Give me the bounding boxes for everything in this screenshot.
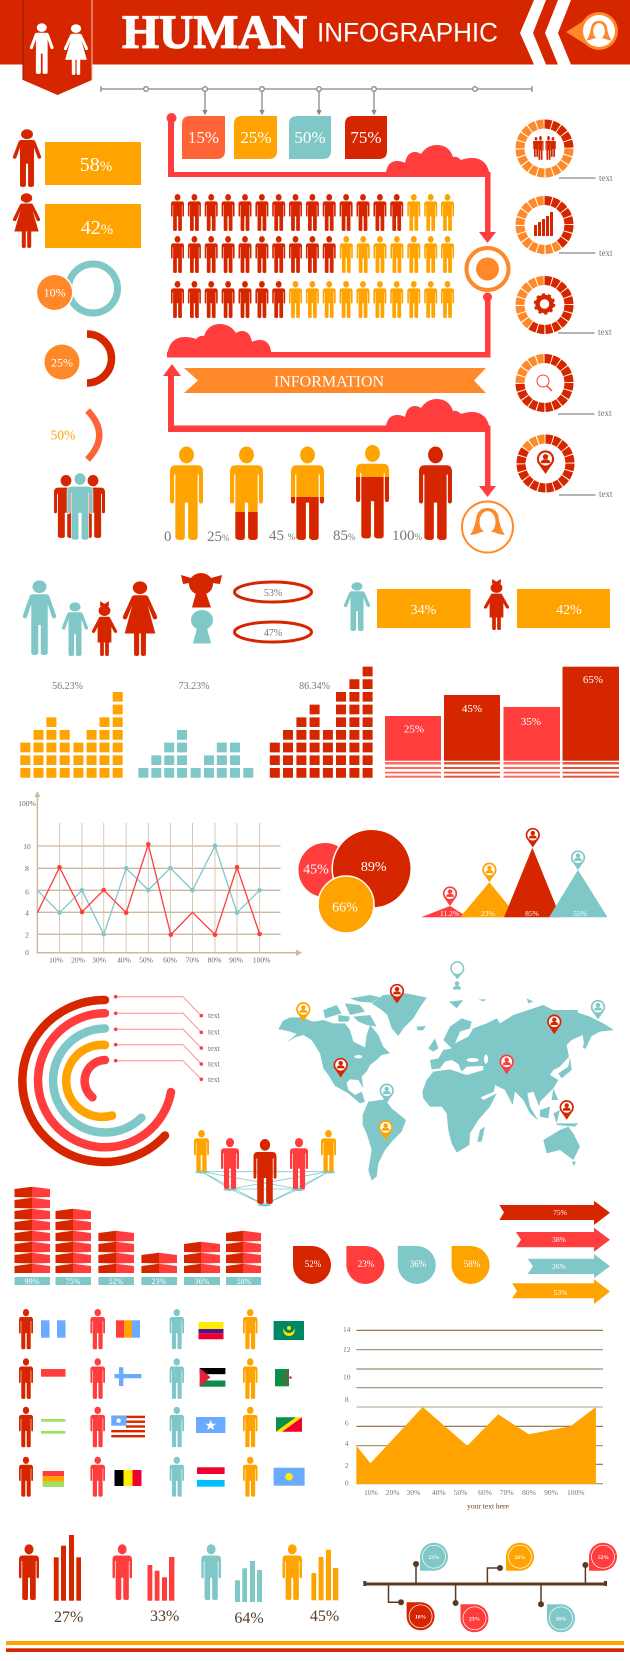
drop shapes: 58%: [464, 1259, 481, 1269]
bottom person bars 33%: [112, 1544, 179, 1625]
column 52%: 52%: [109, 1277, 124, 1286]
line chart: 100%: [18, 799, 36, 808]
flag red bar: [41, 1369, 66, 1377]
people network: [194, 1130, 336, 1206]
area chart: 10: [343, 1372, 351, 1382]
concentric arc chart: [22, 1000, 171, 1162]
ribbon with man and woman: [23, 0, 92, 95]
title: HUMAN: [122, 6, 307, 59]
line chart: 90%: [229, 956, 243, 964]
block chart teal: 73.23%: [179, 681, 209, 692]
bottom person bars 27%: 27%: [54, 1609, 83, 1626]
progress figures: 25%: [207, 529, 230, 545]
arc chart legend: [114, 995, 221, 1084]
line chart: 2: [25, 930, 29, 940]
triangle chart with pins: 23%: [481, 909, 495, 918]
block chart teal: [143, 681, 248, 778]
ellipses 53% 47%: [234, 582, 312, 642]
bottom person bars 45%: [282, 1544, 339, 1625]
left gender bars: 42%: [81, 217, 113, 239]
subtitle: INFOGRAPHIC: [317, 18, 498, 48]
flag cross: [114, 1367, 141, 1386]
ring: location: [521, 439, 613, 499]
area chart: 70%: [500, 1488, 514, 1497]
people with flags column 3: [170, 1309, 225, 1497]
children heads: [181, 573, 222, 644]
ring 50%: 50%: [51, 428, 75, 442]
area chart: 40%: [432, 1488, 446, 1497]
flag green bars: [41, 1419, 66, 1434]
area chart: 12: [343, 1345, 351, 1354]
ring 10%: 10%: [44, 286, 66, 300]
area chart: 0: [345, 1478, 349, 1488]
line chart: 10: [23, 842, 31, 851]
left gender bars: [13, 129, 141, 248]
triangle chart with pins: 85%: [525, 909, 539, 918]
pin drops: 52%: [598, 1555, 609, 1561]
line chart: 40%: [117, 956, 131, 964]
pin drops: 58%: [514, 1555, 526, 1561]
drop shapes: 23%: [358, 1259, 375, 1269]
column 75%: 75%: [66, 1277, 81, 1286]
ring 25%: 25%: [51, 356, 73, 370]
flag blue white blue: [41, 1320, 66, 1338]
arc chart legend: text: [208, 1011, 221, 1020]
column 99%: 99%: [25, 1277, 40, 1286]
line chart: 50%: [139, 956, 153, 964]
family: [23, 580, 157, 656]
arc chart legend: text: [208, 1028, 221, 1036]
icon: header avatar: [566, 12, 618, 50]
flag diagonal: [276, 1417, 302, 1432]
pin drops: [407, 1543, 617, 1632]
map pins: [297, 962, 604, 1140]
group of three people: [54, 473, 105, 540]
ring 10%: [36, 264, 118, 313]
area chart: 90%: [544, 1488, 558, 1497]
flag blue with circle: [274, 1468, 305, 1486]
column 99%: [14, 1187, 50, 1286]
triangle chart with pins: 11.2%: [440, 909, 459, 918]
percentage tabs: 25%: [240, 128, 272, 147]
ring: bars: text: [599, 248, 613, 258]
progress figures: 100%: [392, 528, 422, 544]
block chart red: 86.34%: [299, 681, 330, 692]
arc chart legend: text: [208, 1075, 221, 1084]
flag green crescent: [274, 1321, 304, 1340]
area chart: 80%: [522, 1488, 536, 1497]
boy and girl bars: [344, 579, 610, 631]
information ribbon: INFORMATION: [274, 374, 385, 390]
ring: magnifier: text: [598, 408, 612, 418]
pin drops: 36%: [556, 1616, 566, 1622]
ring: gear: text: [598, 327, 612, 337]
area chart: 2: [345, 1461, 349, 1470]
information ribbon: [184, 368, 486, 393]
percentage tabs: 75%: [350, 128, 382, 147]
flow arrows with clouds: [163, 113, 496, 497]
flag black white green with triangle: [200, 1368, 225, 1387]
flag green with crescent: [275, 1369, 292, 1386]
people with flags column 1: [19, 1309, 66, 1497]
line chart: 80%: [208, 956, 221, 964]
progress figures: 85%: [333, 528, 356, 544]
bottom person bars 33%: 33%: [150, 1608, 179, 1625]
area chart: 8: [345, 1395, 349, 1404]
area chart: 20%: [386, 1488, 399, 1497]
ring: people: [520, 124, 613, 183]
branching timeline: [365, 1543, 617, 1632]
segmented rings: [520, 124, 613, 499]
drop shapes: 36%: [410, 1259, 427, 1269]
line chart: 70%: [186, 956, 199, 964]
bar chart with stripes: 45%: [462, 703, 482, 715]
venn circles: 89%: [361, 860, 387, 875]
chevrons: [520, 0, 571, 64]
column 23%: 23%: [152, 1277, 167, 1286]
stacked 3D columns: [14, 1187, 261, 1286]
column 52%: [98, 1231, 134, 1286]
world map: [278, 962, 614, 1181]
drop shapes: [293, 1246, 490, 1284]
bottom person bars 45%: 45%: [310, 1608, 339, 1625]
area chart: 100%: [567, 1488, 585, 1497]
area chart: 6: [345, 1418, 349, 1428]
ribbon arrows: 53%: [554, 1288, 567, 1297]
ring 50%: [51, 410, 99, 460]
line chart: 30%: [92, 956, 106, 964]
ring: people: text: [599, 173, 613, 183]
ring: location: text: [599, 489, 613, 499]
ribbon arrows: [499, 1201, 610, 1304]
ribbon arrows: 75%: [553, 1208, 567, 1217]
area chart: 30%: [407, 1488, 420, 1497]
flag tricolor: [43, 1471, 64, 1487]
bar chart with stripes: 65%: [583, 674, 603, 686]
percentage tabs: 50%: [294, 128, 326, 147]
ribbon arrows: 38%: [552, 1235, 566, 1244]
venn circles: [298, 829, 411, 933]
people with flags column 2: [90, 1309, 145, 1497]
header banner: [0, 0, 630, 95]
block chart orange: [25, 681, 118, 778]
pin drops: 23%: [428, 1555, 440, 1561]
venn circles: 45%: [303, 862, 329, 878]
people grid row 2: [171, 236, 454, 273]
bottom person bars 27%: [19, 1535, 83, 1626]
column 58%: [226, 1231, 261, 1286]
people grid row 1: [171, 194, 454, 231]
ring 25%: [44, 334, 111, 383]
flag black yellow red: [114, 1470, 142, 1486]
ellipses 53% 47%: 47%: [264, 628, 282, 639]
progress figures: [164, 445, 452, 545]
timeline with arrows: [101, 86, 532, 114]
bar chart with stripes: 25%: [404, 724, 424, 736]
flag yellow indigo red: [198, 1322, 224, 1339]
line chart: 0: [25, 948, 29, 957]
bar chart with stripes: [385, 667, 619, 778]
line chart: [18, 791, 302, 964]
line chart: 4: [25, 908, 29, 918]
ring: bars: [520, 200, 613, 258]
block chart orange: 56.23%: [52, 681, 83, 692]
area chart: 10%: [364, 1488, 378, 1497]
people with flags column 4: [243, 1309, 305, 1497]
flag star: [196, 1417, 225, 1433]
boy and girl bars: 34%: [411, 603, 437, 618]
boy and girl bars: 42%: [556, 603, 582, 618]
area chart: 14: [343, 1325, 351, 1334]
ring: magnifier: [520, 358, 612, 418]
icon: avatar circle: [462, 502, 513, 552]
area chart: 50%: [454, 1488, 467, 1497]
percentage tabs: [182, 116, 387, 159]
column 75%: [56, 1209, 91, 1286]
bar chart with stripes: 35%: [521, 716, 541, 728]
column 36%: 36%: [195, 1277, 210, 1286]
ring: gear: [520, 280, 612, 337]
percentage tabs: 15%: [188, 128, 219, 147]
column 36%: [184, 1242, 220, 1286]
arc chart legend: text: [208, 1044, 221, 1053]
left gender bars: 58%: [80, 154, 112, 176]
ribbon arrows: 26%: [552, 1262, 566, 1271]
line chart: 60%: [163, 956, 177, 964]
line chart: 100%: [253, 956, 270, 964]
progress figures: 45 %: [269, 528, 296, 544]
line chart: 10%: [49, 956, 63, 964]
area chart: [343, 1325, 603, 1510]
triangle chart with pins: 55%: [573, 909, 587, 918]
venn circles: 66%: [332, 900, 358, 916]
people grid row 3: [171, 281, 454, 318]
bottom person bars 64%: [201, 1544, 264, 1627]
flag vertical tricolor: [116, 1320, 140, 1338]
pin drops: 18%: [415, 1614, 426, 1620]
flag red sky: [197, 1467, 225, 1487]
area chart: 60%: [478, 1488, 492, 1497]
target icon: [466, 248, 508, 290]
footer bars: [6, 1641, 624, 1652]
line chart: 8: [25, 864, 29, 873]
ellipses 53% 47%: 53%: [264, 588, 282, 599]
area chart caption: your text here: [467, 1502, 509, 1510]
triangle chart with pins: [421, 829, 608, 918]
block chart red: [275, 664, 368, 778]
flag stripes: [111, 1416, 145, 1437]
arc chart legend: text: [208, 1060, 221, 1068]
area chart: 4: [345, 1439, 349, 1448]
drop shapes: 52%: [305, 1259, 322, 1269]
line chart: 6: [25, 888, 29, 896]
line chart: 20%: [71, 956, 85, 964]
column 23%: [141, 1253, 177, 1286]
bottom person bars 64%: 64%: [234, 1610, 264, 1627]
pin drops: 23%: [469, 1616, 480, 1622]
column 58%: 58%: [237, 1277, 252, 1286]
progress figures: 0: [164, 529, 172, 545]
